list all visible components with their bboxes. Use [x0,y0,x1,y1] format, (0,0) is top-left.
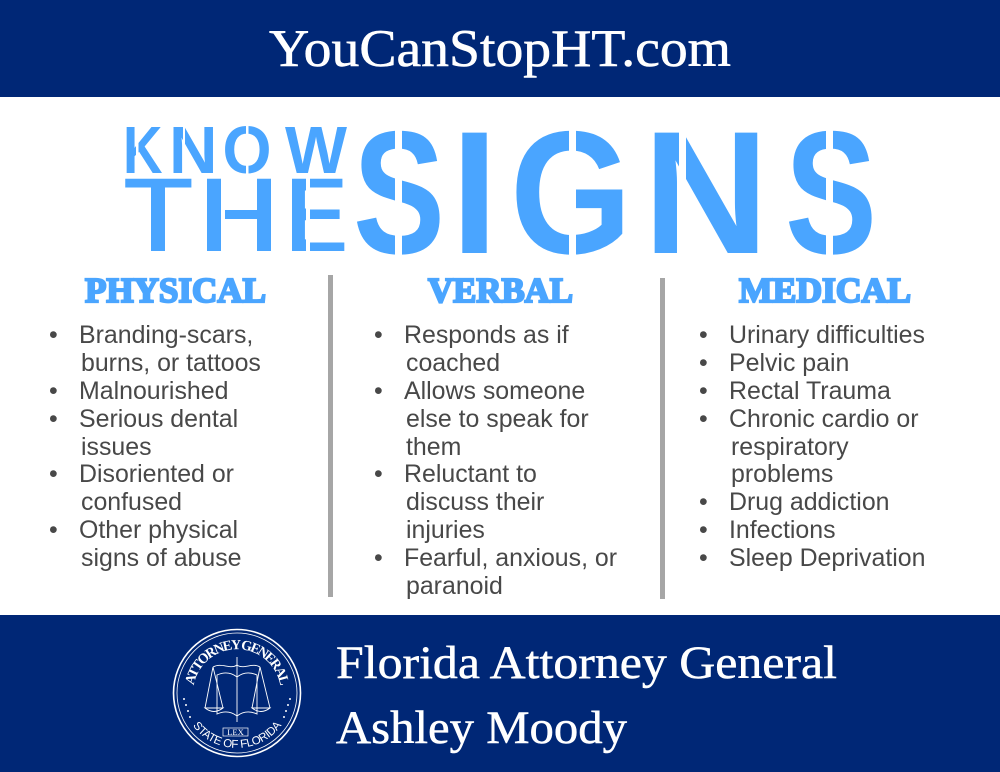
list: verbal signs: Responds as if [404,321,569,349]
footer text: Ashley Moody [336,702,628,754]
list: medical signs: respiratory [731,433,849,461]
title word: the [118,157,348,274]
title word: signs: S [353,96,445,291]
list: verbal signs: paranoid [406,572,503,600]
heading: medical: MEDICAL [739,271,911,310]
title word: know: W [285,113,348,188]
list: medical signs [699,321,925,572]
list: medical signs: problems [731,460,833,488]
title word: know: K [123,113,162,188]
list: verbal signs [374,321,617,600]
list: verbal signs: else to speak for [406,405,589,433]
panel: physical [49,271,266,572]
list: physical signs: • [49,516,58,544]
list: verbal signs: • [374,544,383,572]
list: medical signs: Sleep Deprivation [729,544,925,572]
list: medical signs: Pelvic pain [729,349,849,377]
title word: know: N [169,113,218,188]
list: medical signs: Drug addiction [729,488,890,516]
divider right [660,278,665,599]
list: medical signs: • [699,544,708,572]
list: medical signs: • [699,516,708,544]
icon: attorney general seal [172,628,302,758]
list: medical signs: Chronic cardio or [729,405,919,433]
title word: know [123,113,348,188]
title word: the: T [124,157,193,274]
list: medical signs: Urinary difficulties [729,321,925,349]
title: know the signs [118,96,877,291]
list: physical signs: • [49,460,58,488]
list: verbal signs: injuries [406,516,485,544]
list: physical signs: issues [81,433,152,461]
list: physical signs [49,321,261,572]
footer text [336,637,837,754]
list: medical signs: Rectal Trauma [729,377,891,405]
icon: attorney general seal: ATTORNEY GENERAL [186,640,288,686]
list: physical signs: burns, or tattoos [81,349,261,377]
divider left [328,275,333,597]
list: verbal signs: • [374,460,383,488]
list: verbal signs: Allows someone [404,377,585,405]
heading: verbal: VERBAL [428,271,573,310]
list: verbal signs: Fearful, anxious, or [404,544,617,572]
list: verbal signs: coached [406,349,500,377]
title word: know: O [222,113,272,188]
icon: attorney general seal: LEX [227,727,244,737]
title word: signs [353,96,877,291]
icon: attorney general seal: STATE OF FLORIDA [194,722,282,748]
header banner [0,0,1000,97]
header website title: YouCanStopHT.com [269,20,731,78]
list: verbal signs: Reluctant to [404,460,537,488]
title word: signs: G [510,96,632,291]
list: physical signs: Disoriented or [79,460,234,488]
list: physical signs: Other physical [79,516,238,544]
heading: physical: PHYSICAL [85,271,266,310]
list: physical signs: Malnourished [79,377,228,405]
list: physical signs: • [49,377,58,405]
list: verbal signs: • [374,377,383,405]
title word: signs: N [643,96,769,291]
list: medical signs: • [699,349,708,377]
list: medical signs: • [699,488,708,516]
list: physical signs: Branding-scars, [79,321,253,349]
title word: the: E [285,157,348,274]
list: verbal signs: • [374,321,383,349]
list: physical signs: • [49,321,58,349]
list: medical signs: • [699,377,708,405]
list: medical signs: Infections [729,516,836,544]
list: verbal signs: them [406,433,461,461]
panel: verbal [374,271,617,600]
footer text: Florida Attorney General [336,637,837,689]
list: verbal signs: discuss their [406,488,544,516]
footer banner [0,615,1000,772]
title word: signs: S [785,96,877,291]
list: medical signs: • [699,321,708,349]
panel: medical [699,271,925,572]
title word: the: H [199,157,279,274]
list: physical signs: signs of abuse [81,544,242,572]
list: physical signs: Serious dental [79,405,238,433]
title word: signs: I [451,96,498,291]
list: physical signs: • [49,405,58,433]
list: physical signs: confused [81,488,182,516]
list: medical signs: • [699,405,708,433]
